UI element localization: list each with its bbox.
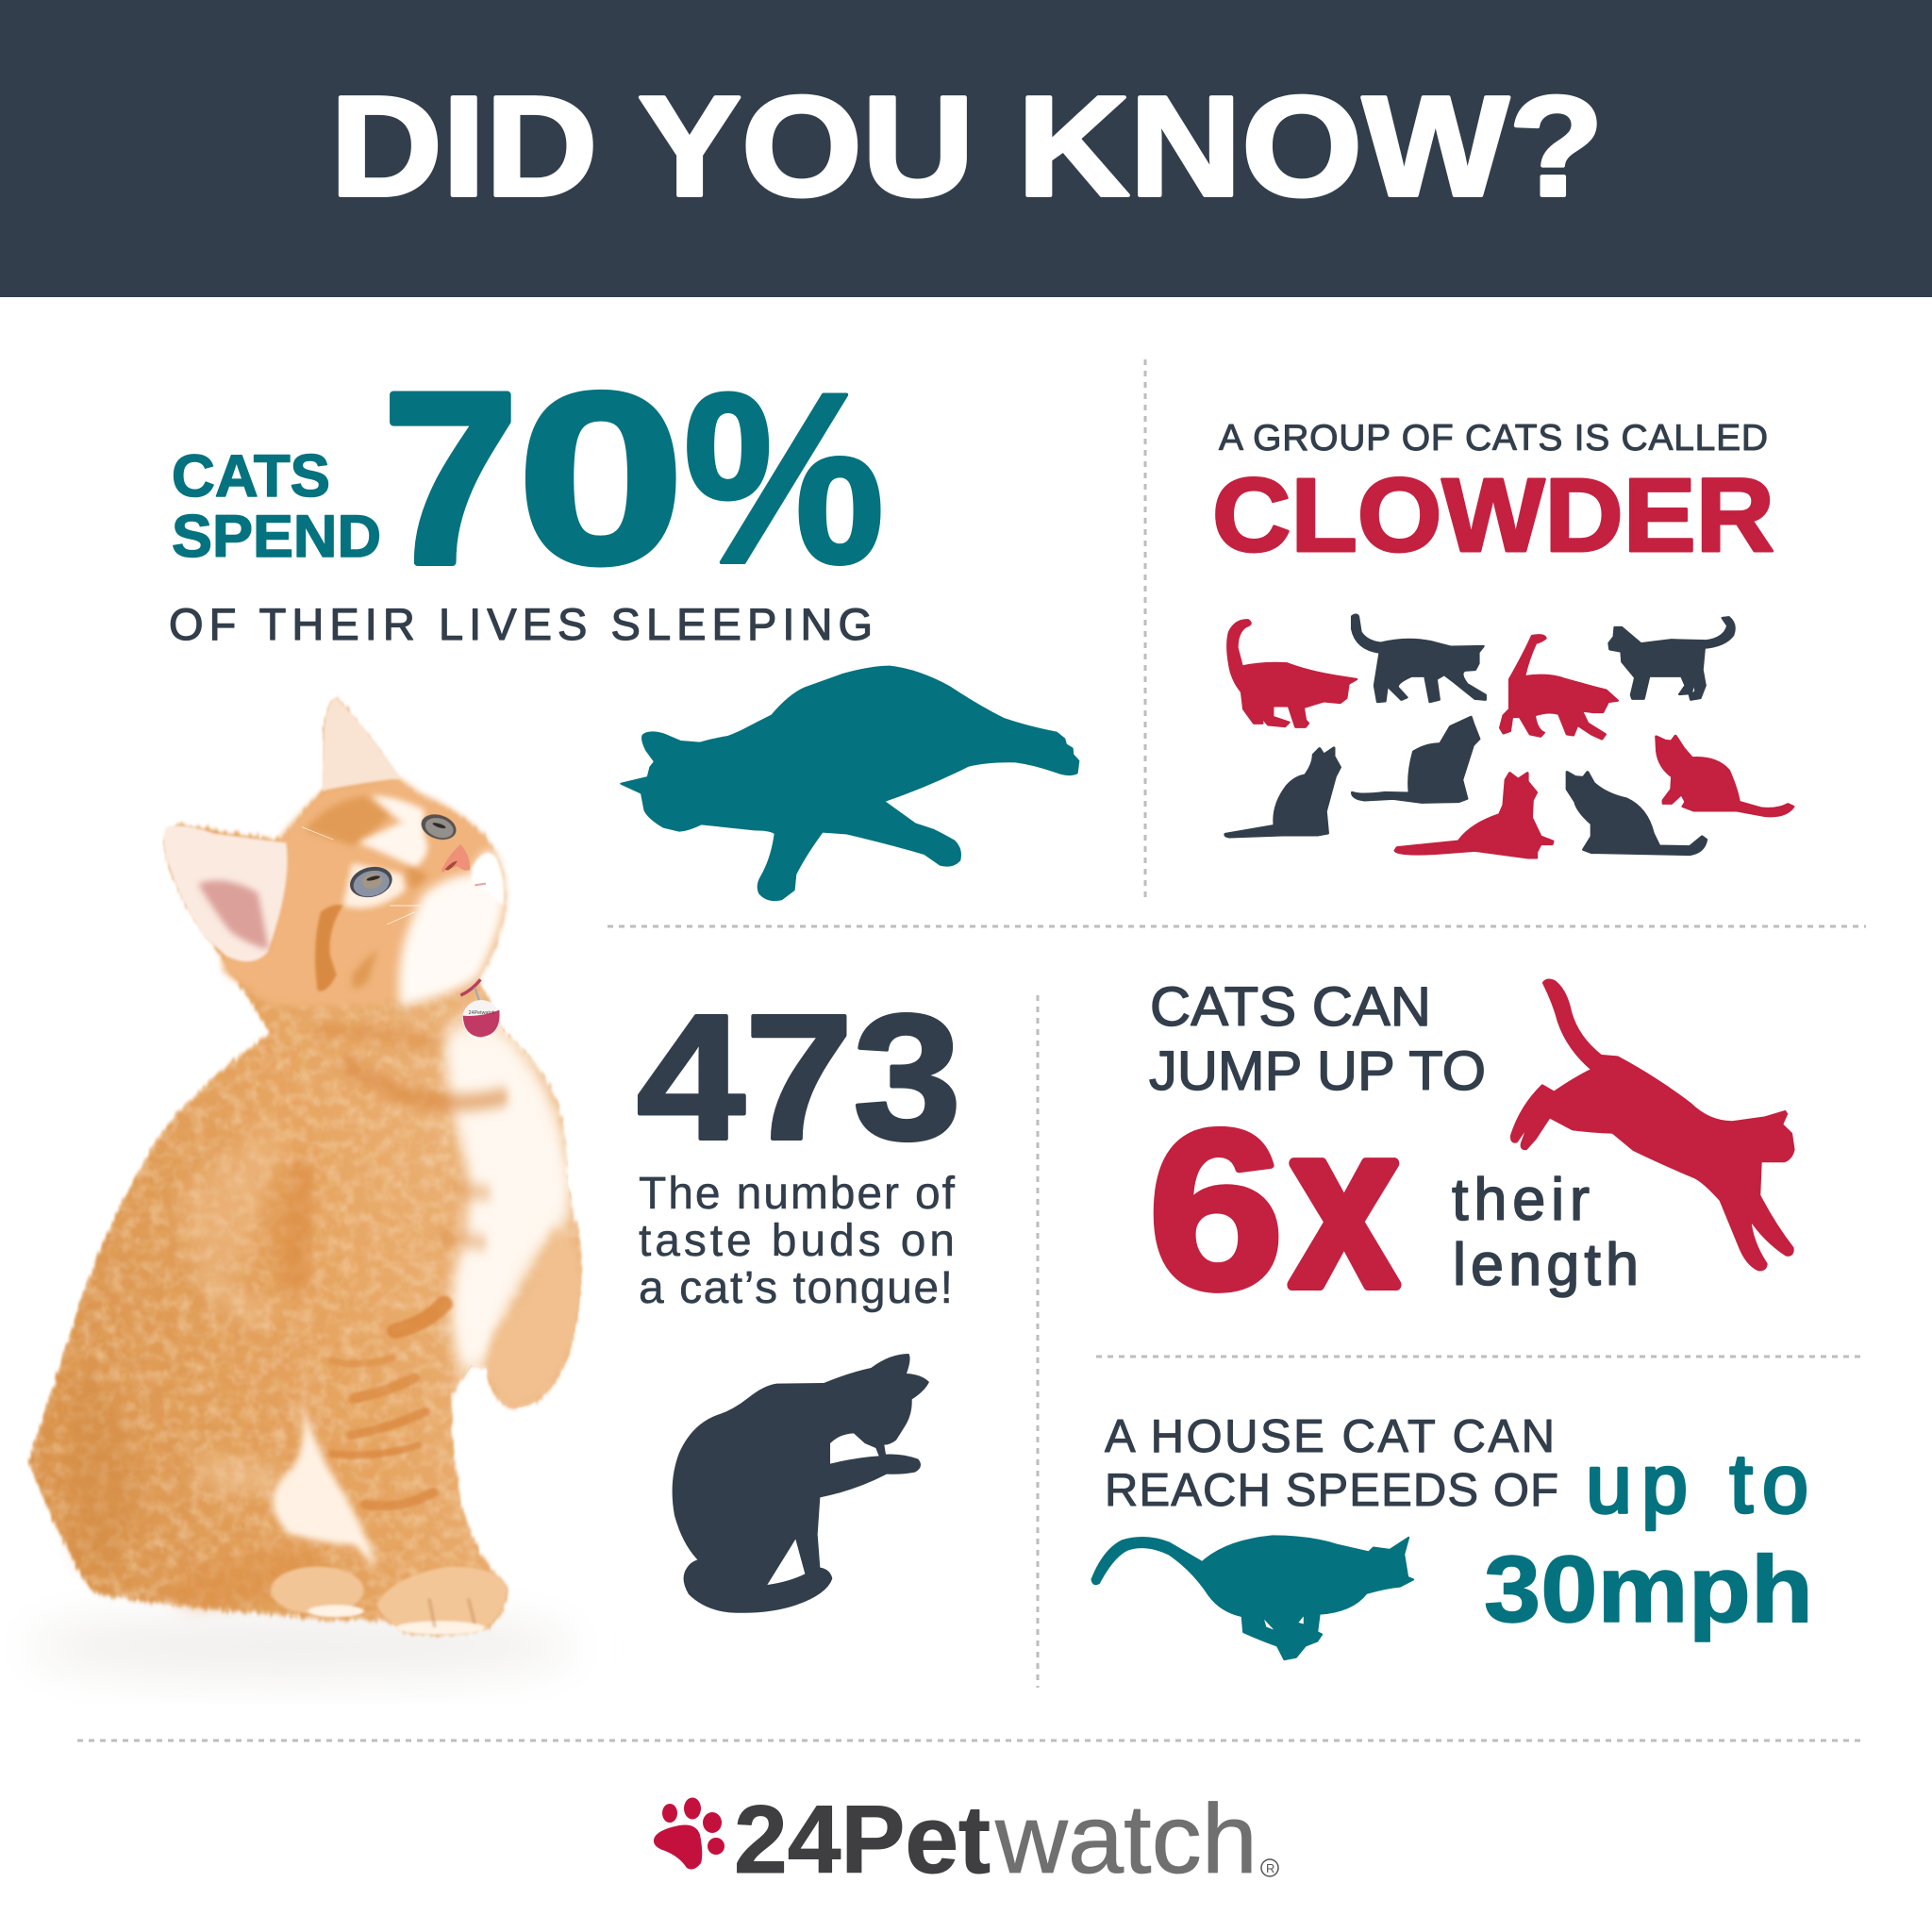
logo: 24Petwatch — [654, 1785, 1278, 1894]
text: cats spend — [172, 443, 381, 570]
registered mark: R — [1266, 1861, 1274, 1875]
text: their length: their — [1452, 1167, 1590, 1233]
dark fur texture — [39, 996, 581, 1635]
rear foot — [271, 1567, 364, 1617]
divider: horizontal lower right — [1096, 1355, 1866, 1358]
kitten lower body detail — [64, 1166, 508, 1635]
pale eye surround — [342, 863, 406, 908]
text: taste buds description: taste buds on — [639, 1216, 955, 1266]
white chest — [445, 1019, 571, 1375]
text: a house cat can reach speeds of: REACH SPEEDS OF — [1105, 1465, 1558, 1516]
icon: sleeping cat silhouette — [621, 667, 1078, 900]
divider: vertical top right — [1143, 359, 1147, 899]
mouth — [475, 884, 486, 885]
text: of their lives sleeping: OF THEIR LIVES SLEEPING — [169, 599, 873, 649]
heading: clowder: CLOWDER — [1212, 458, 1774, 574]
icon: group of nine cat silhouettes — [1225, 615, 1793, 858]
raised paw — [487, 1229, 583, 1411]
top ear — [323, 698, 401, 791]
text: taste buds description: The number of — [639, 1169, 956, 1219]
text: cats can jump up to: JUMP UP TO — [1149, 1041, 1486, 1102]
icon: paw print — [654, 1798, 724, 1870]
big number 70%: % — [683, 341, 885, 614]
text: cats can jump up to — [1149, 976, 1486, 1102]
title: DID YOU KNOW? — [330, 66, 1604, 225]
whiskers — [302, 827, 422, 924]
light fur texture — [30, 991, 579, 1626]
nose — [441, 844, 470, 873]
text: a house cat can reach speeds of: A HOUSE CAT CAN — [1105, 1411, 1555, 1462]
big number 473: 473 — [637, 978, 961, 1177]
kitten floor shadow — [28, 1614, 575, 1678]
text: cats spend: CATS — [172, 443, 330, 509]
text: a house cat can reach speeds of — [1105, 1411, 1558, 1516]
white muzzle — [399, 850, 506, 1007]
eye near — [347, 862, 395, 902]
text: cats spend: SPEND — [172, 504, 381, 570]
text: taste buds description — [639, 1169, 956, 1313]
big number 6x: x — [1291, 1076, 1398, 1334]
panel: clowder — [1212, 418, 1793, 858]
logo word: watch: watch — [994, 1785, 1257, 1894]
icon: jumping cat silhouette — [1511, 980, 1793, 1270]
big number 30mph: 30mph — [1484, 1537, 1813, 1642]
header banner — [0, 0, 1932, 297]
pale belly — [273, 1368, 388, 1617]
text: their length — [1452, 1167, 1639, 1298]
panel: taste buds — [637, 978, 961, 1613]
kitten body — [26, 695, 584, 1640]
text: cats can jump up to: CATS CAN — [1150, 976, 1431, 1038]
panel: sleeping statistic — [169, 341, 1078, 900]
divider: vertical lower middle — [1036, 995, 1040, 1688]
photo: orange kitten looking up — [0, 698, 614, 1678]
cheek stripes — [315, 905, 342, 991]
head fur — [220, 778, 506, 1007]
logo word: 24Pet: 24Pet — [734, 1786, 991, 1893]
neck and chest stripes — [294, 1031, 503, 1275]
kitten head — [163, 698, 506, 1038]
text: taste buds description: a cat’s tongue! — [639, 1263, 953, 1313]
divider: horizontal bottom — [77, 1740, 1866, 1741]
panel: speed — [1091, 1411, 1813, 1659]
big number 70%: 7 — [383, 341, 518, 614]
eye far — [418, 810, 459, 844]
big number 70% — [383, 341, 885, 614]
divider: horizontal middle — [608, 924, 1866, 928]
text: up to: up to — [1586, 1437, 1808, 1530]
collar and tag: 24Petwatch — [469, 1010, 495, 1016]
side ear — [163, 825, 288, 961]
collar and tag — [460, 979, 500, 1038]
big number 6x: 6 — [1148, 1083, 1284, 1336]
leg stripes — [332, 1304, 444, 1506]
leg shade — [64, 1368, 142, 1567]
text: their length: length — [1453, 1232, 1639, 1298]
icon: running cat silhouette — [1091, 1536, 1413, 1659]
icon: grooming cat silhouette — [673, 1354, 929, 1613]
white forehead band — [358, 814, 427, 868]
registered mark — [1261, 1859, 1278, 1876]
white nose tip — [472, 853, 504, 906]
inner ear — [198, 880, 269, 950]
front foot — [377, 1567, 508, 1635]
forehead tabby patch — [305, 795, 390, 846]
big number 70%: 0 — [517, 341, 685, 614]
fur highlight on shoulder — [175, 1124, 287, 1289]
text: a group of cats is called: A GROUP OF CATS IS CALLED — [1219, 418, 1768, 458]
panel: jump — [1148, 976, 1793, 1336]
big number 6x — [1148, 1076, 1398, 1336]
